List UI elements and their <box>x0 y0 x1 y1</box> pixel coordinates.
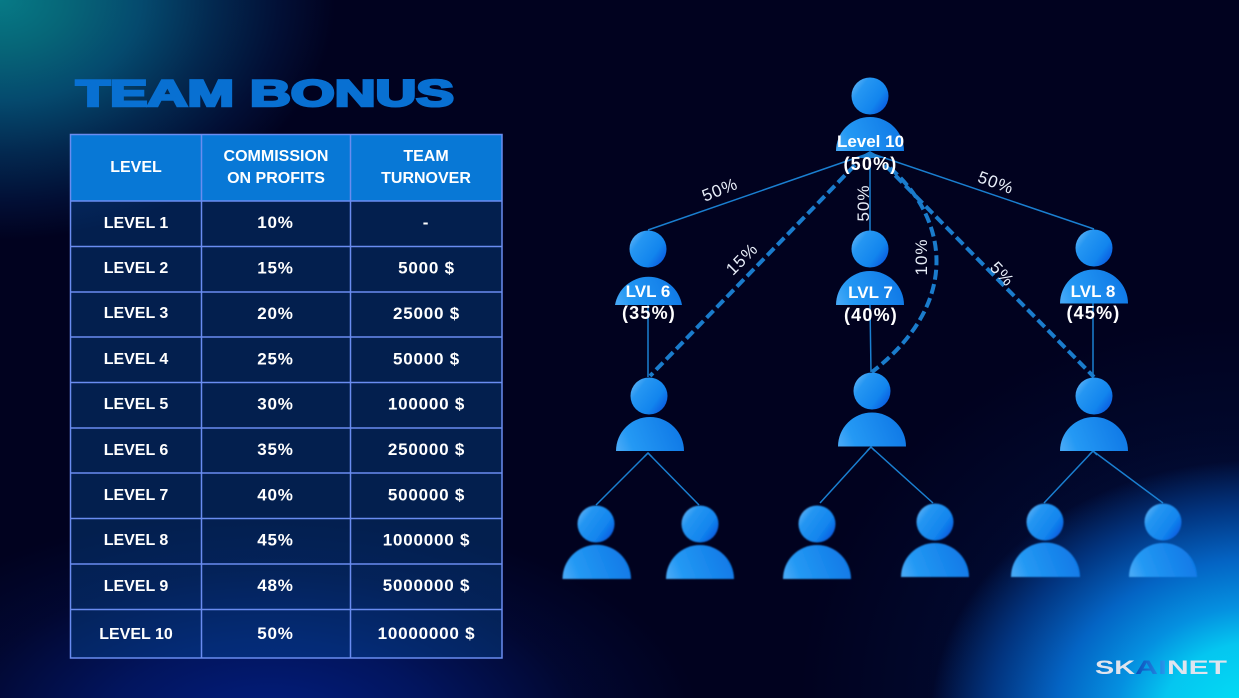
person: level 10 <box>836 78 904 151</box>
table rows: LEVEL 7 <box>104 487 168 504</box>
person: bottom 4 <box>901 504 969 577</box>
label: level 8 <box>1066 282 1121 323</box>
table rows: LEVEL 4 <box>104 351 168 368</box>
bonus table <box>70 134 502 658</box>
table rows: LEVEL 3 <box>104 305 168 322</box>
table rows: 45% <box>257 530 294 550</box>
table rows: 50% <box>257 624 294 643</box>
label: level 7: (40%) <box>844 305 898 325</box>
person: level 6 <box>615 230 682 305</box>
label: level 10: (50%) <box>843 154 898 174</box>
table body background <box>70 201 502 658</box>
person: bottom 1 <box>562 506 631 579</box>
label: level 10: Level 10 <box>837 132 904 151</box>
table rows: 50000 $ <box>393 350 460 368</box>
logo: SKAINET: SK <box>1095 658 1135 679</box>
table rows: 100000 $ <box>388 394 465 414</box>
table rows: LEVEL 6 <box>104 442 168 459</box>
table rows: LEVEL 1 <box>104 215 168 232</box>
table header row <box>70 134 502 201</box>
label: level 7: LVL 7 <box>848 283 893 302</box>
person: second row left <box>616 378 684 451</box>
percentage: 50% right: 50% <box>975 168 1017 198</box>
table rows: 30% <box>257 394 294 414</box>
logo: SKAINET: NET <box>1167 658 1228 679</box>
table rows: 1000000 $ <box>383 530 470 550</box>
table rows: 10000000 $ <box>378 624 475 643</box>
dashed commission lines <box>650 165 1094 377</box>
label: level 6: (35%) <box>622 303 676 323</box>
percentage: 15%: 15% <box>722 239 762 279</box>
table header row: COMMISSION <box>224 148 328 165</box>
label: level 6 <box>622 282 676 323</box>
person: bottom 6 <box>1129 504 1197 577</box>
table rows: LEVEL 5 <box>104 396 168 413</box>
arrow tips under level 10 <box>858 151 882 158</box>
title: BONUS <box>250 72 454 114</box>
table rows: LEVEL 2 <box>104 260 168 277</box>
table header row: TEAM <box>403 148 449 165</box>
title <box>76 72 454 114</box>
table rows: LEVEL 10 <box>99 626 173 643</box>
table rows: - <box>423 213 429 232</box>
table rows: 40% <box>257 486 294 504</box>
table rows: 25000 $ <box>393 304 460 323</box>
person: bottom 2 <box>666 506 734 579</box>
table rows: 250000 $ <box>388 440 465 459</box>
table header row: TURNOVER <box>381 170 471 187</box>
percentage: 50% left: 50% <box>699 174 741 206</box>
percentage: 5%: 5% <box>986 258 1018 290</box>
person: second row middle <box>838 372 906 446</box>
percentage: 10%: 10% <box>912 238 931 276</box>
table rows: 500000 $ <box>388 486 465 504</box>
table rows: 25% <box>257 350 294 368</box>
title: TEAM <box>76 72 234 114</box>
person: second row right <box>1060 378 1128 451</box>
table rows: 5000000 $ <box>383 576 470 595</box>
label: level 8: LVL 8 <box>1071 282 1115 301</box>
label: level 6: LVL 6 <box>626 282 670 301</box>
person: bottom 5 <box>1011 504 1080 577</box>
table rows: 35% <box>257 440 294 459</box>
table header row: ON PROFITS <box>227 170 325 187</box>
table rows: 15% <box>257 258 294 278</box>
label: level 10 <box>837 132 904 174</box>
label: level 8: (45%) <box>1066 303 1121 323</box>
table rows: LEVEL 8 <box>104 532 168 549</box>
table rows: 20% <box>257 304 294 323</box>
table rows: LEVEL 9 <box>104 578 168 595</box>
table header row: LEVEL <box>110 159 162 176</box>
person: bottom 3 <box>783 506 851 579</box>
logo: SKAINET: AI <box>1135 658 1167 679</box>
person: level 8 <box>1060 230 1128 304</box>
percentage: 50% centre: 50% <box>854 184 873 222</box>
table rows: 5000 $ <box>398 258 455 278</box>
person: level 7 <box>836 230 904 305</box>
table rows: 48% <box>257 576 294 595</box>
table rows: 10% <box>257 213 294 232</box>
logo: SKAINET <box>1095 658 1228 679</box>
solid connector lines <box>596 153 1163 505</box>
label: level 7 <box>844 283 898 325</box>
table rows <box>99 213 475 643</box>
